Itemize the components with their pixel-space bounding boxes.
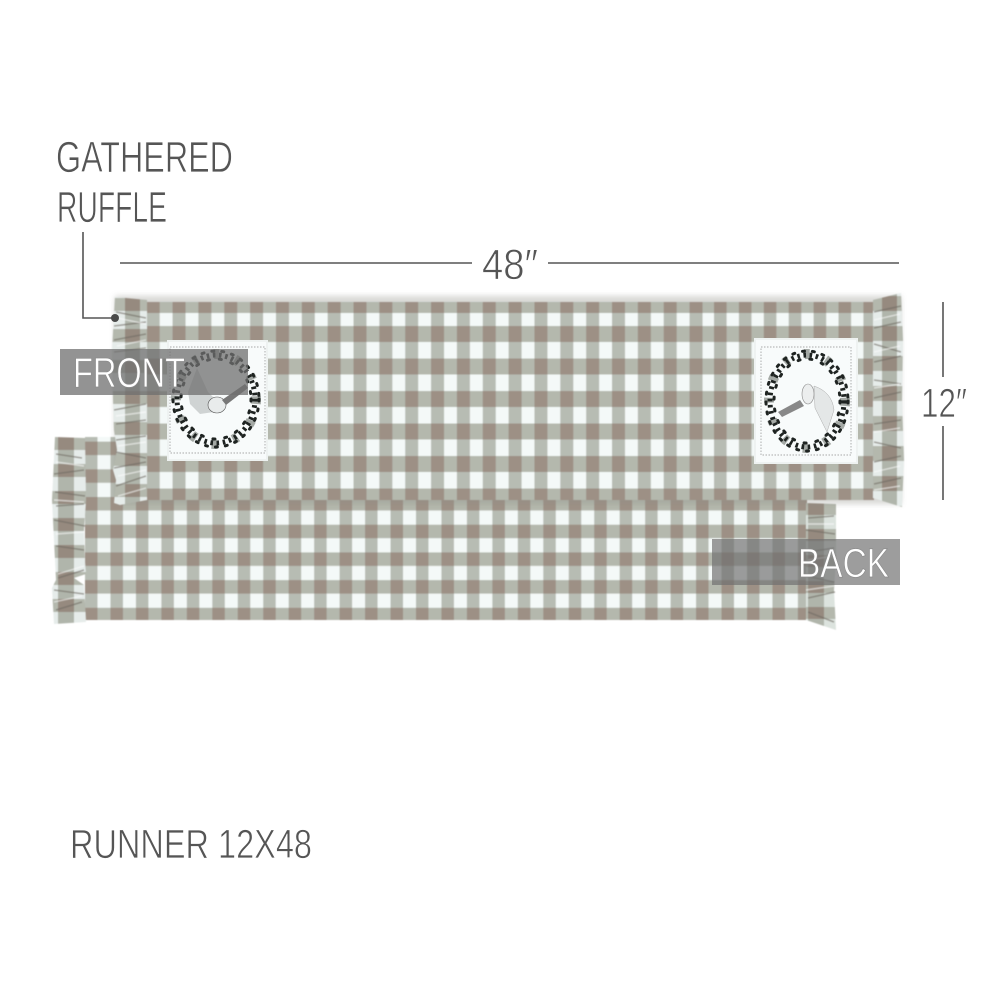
patch: right bunny wreath	[755, 339, 857, 463]
bunny	[778, 384, 834, 432]
front left ruffle	[112, 297, 147, 505]
wreath	[766, 351, 848, 451]
back left ruffle	[52, 437, 86, 624]
label: front: FRONT	[73, 349, 185, 396]
dimension: 12 inches: 12″	[921, 380, 967, 426]
product name: RUNNER 12X48	[70, 821, 312, 867]
label: back	[712, 539, 900, 586]
bunny	[188, 368, 248, 414]
wreath	[173, 351, 259, 447]
back right ruffle	[806, 503, 836, 630]
heading: gathered ruffle	[56, 133, 233, 232]
front right ruffle	[873, 293, 904, 507]
callout leader: gathered ruffle	[83, 232, 119, 322]
label: back: BACK	[798, 540, 889, 586]
heading: gathered ruffle: GATHERED	[56, 133, 233, 182]
back runner body	[85, 437, 807, 620]
patch: left bunny wreath	[168, 341, 267, 460]
back runner	[52, 437, 836, 630]
dimension: 48 inches: 48″	[482, 241, 538, 289]
front runner shadow	[115, 296, 901, 504]
front runner body	[147, 302, 874, 500]
front runner	[112, 293, 904, 507]
heading: gathered ruffle: RUFFLE	[57, 183, 167, 232]
